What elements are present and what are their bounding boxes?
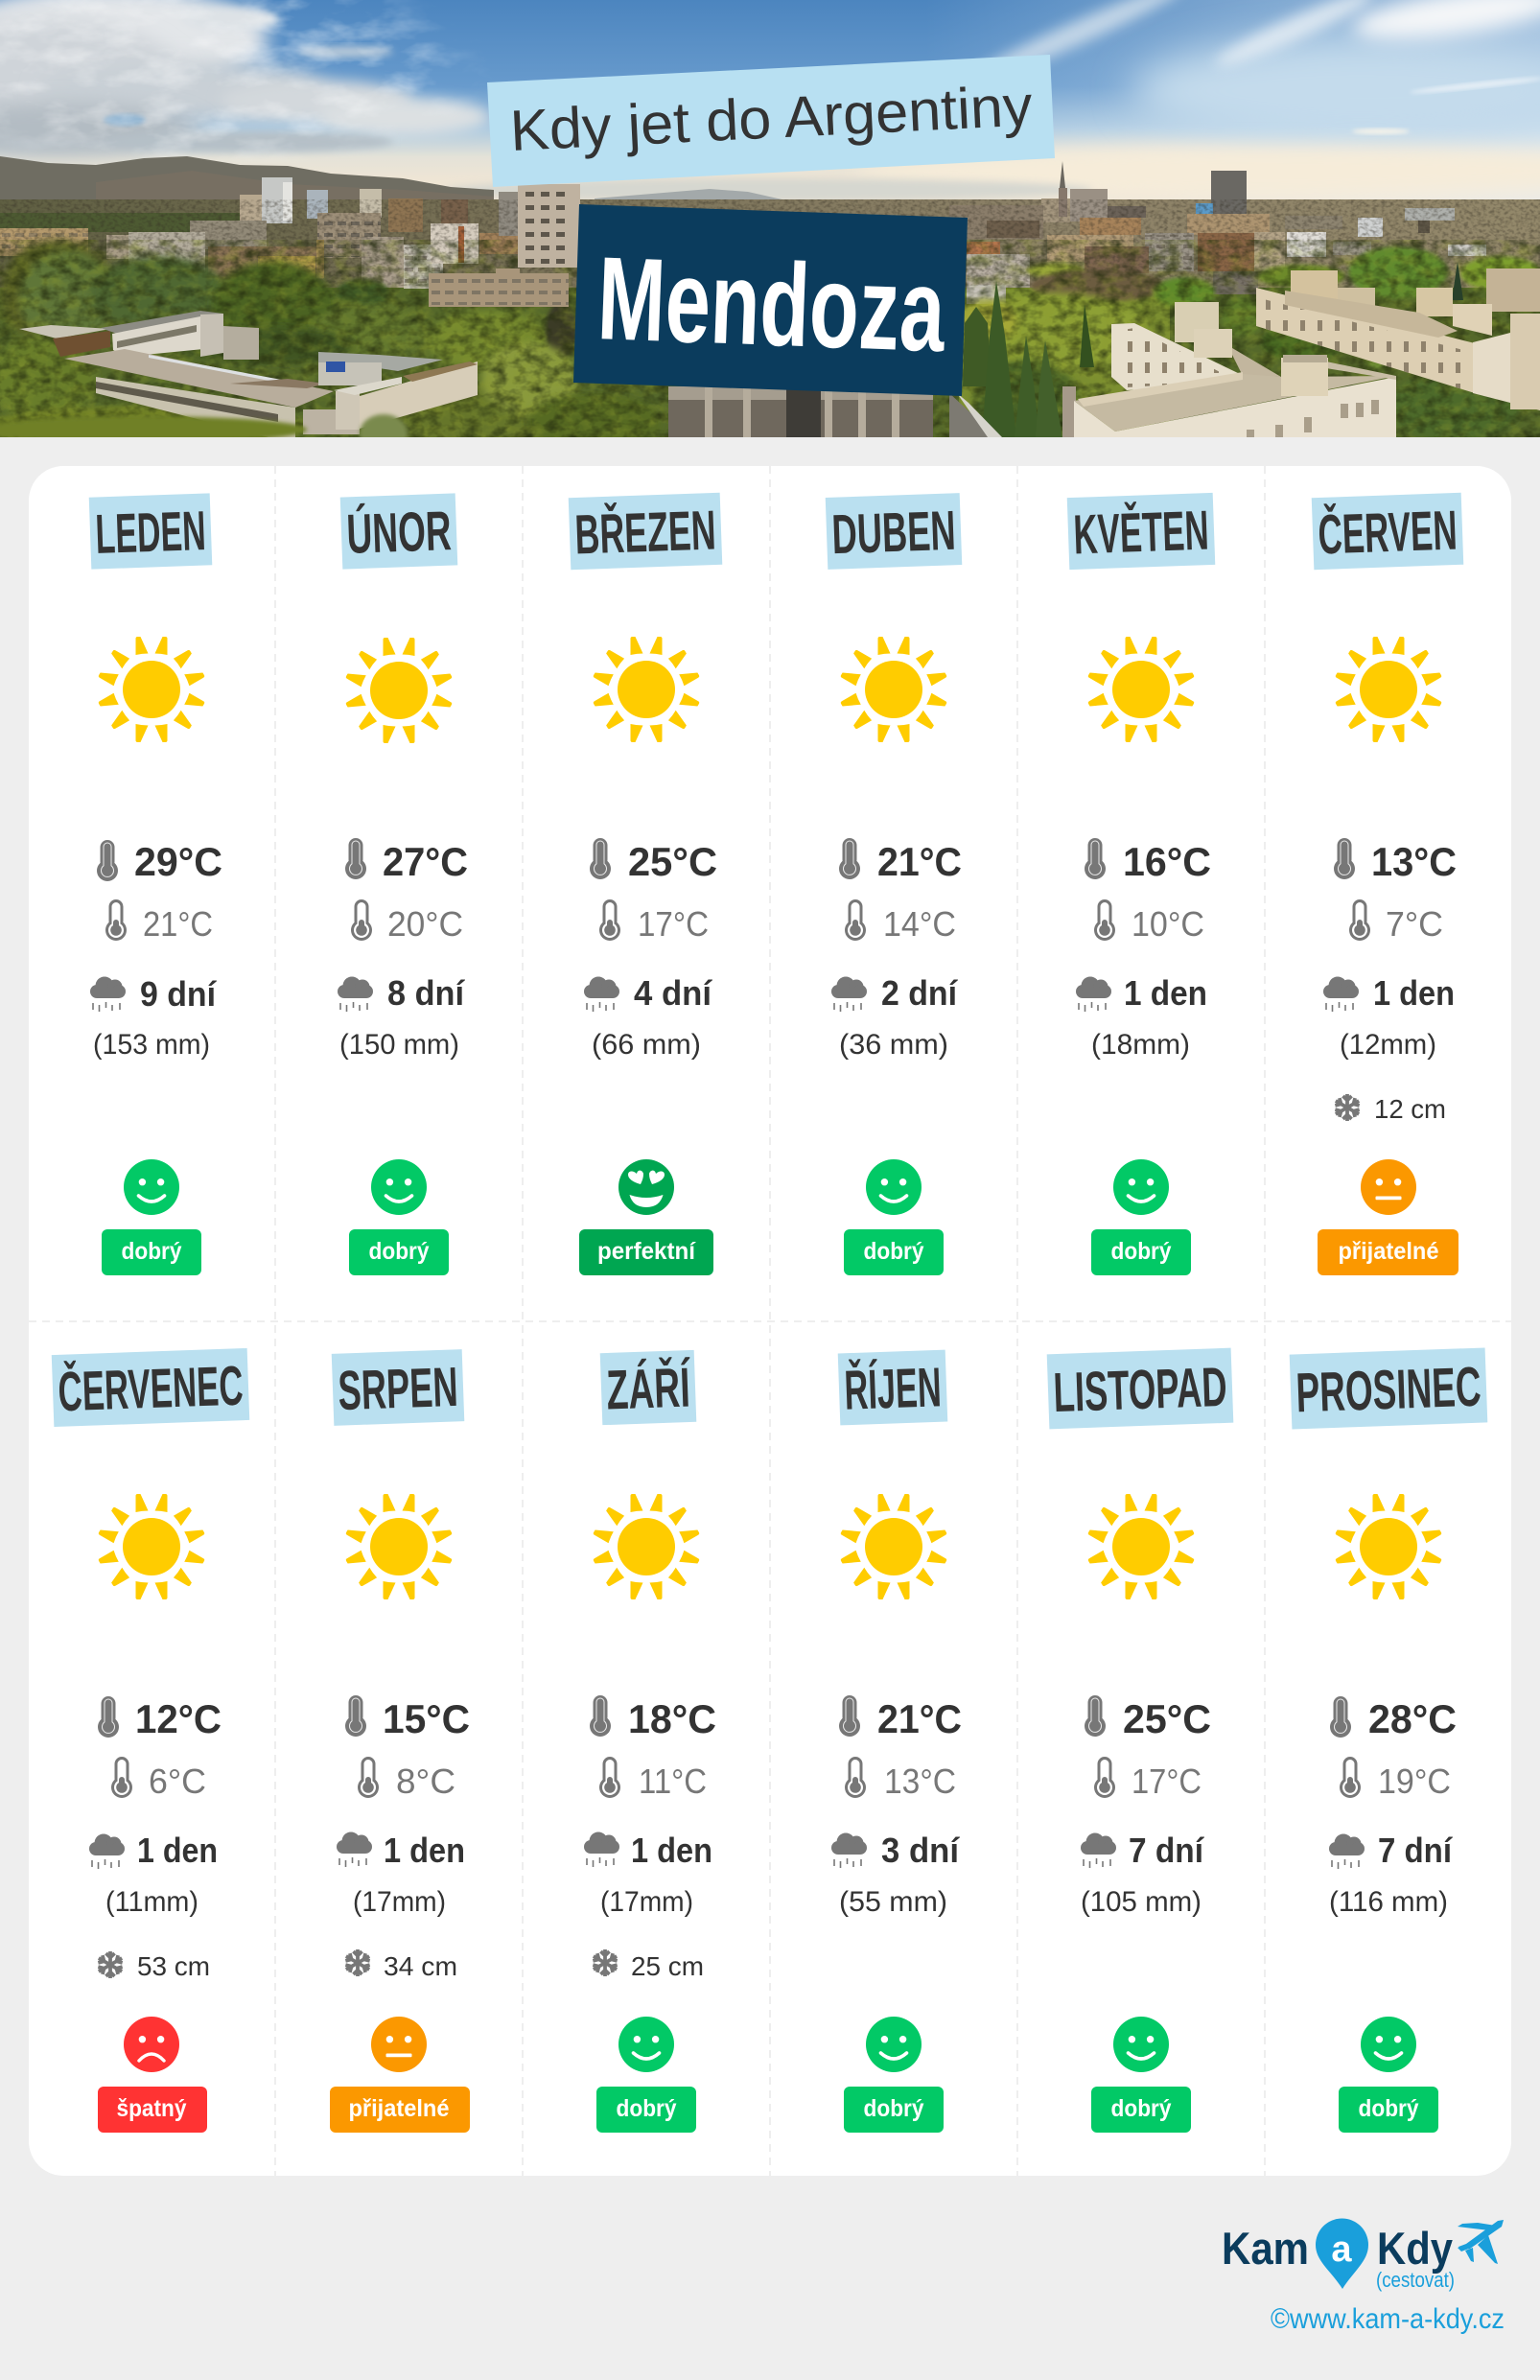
month: duben (826, 493, 962, 1275)
rating badge (1318, 1229, 1458, 1275)
rating badge: dobrý (121, 1238, 182, 1265)
rainy days: 2 dní (881, 973, 958, 1013)
low temperature (105, 899, 213, 944)
month label (569, 493, 722, 570)
precipitation: (17mm) (353, 1886, 446, 1918)
icon: sun (1335, 637, 1442, 742)
rainy days: 1 den (137, 1831, 218, 1870)
rainy days: 1 den (631, 1831, 712, 1870)
precipitation: (11mm) (105, 1886, 198, 1918)
title banner: Kdy jet do Argentiny: Kdy jet do Argentiny (508, 73, 1034, 163)
month: únor (338, 493, 468, 1275)
low temperature (599, 899, 709, 944)
icon: sun (98, 637, 205, 742)
month: březen (569, 493, 722, 1275)
rainy days (338, 973, 465, 1013)
month: září (584, 1350, 716, 2133)
logo: Kam a Kdy (1222, 2219, 1504, 2292)
title banner: Mendoza: Mendoza (595, 233, 948, 377)
high temperature: 18°C (628, 1696, 716, 1741)
rainy days: 8 dní (387, 973, 465, 1013)
low temperature (1094, 899, 1204, 944)
rating badge (102, 1229, 201, 1275)
snowfall (97, 1951, 210, 1981)
rating face (866, 1159, 922, 1215)
snowfall (1334, 1094, 1446, 1124)
month label: ZÁŘÍ (605, 1356, 692, 1421)
icon: sun (840, 637, 947, 742)
month: červen (1312, 493, 1463, 1275)
month: leden (89, 493, 222, 1275)
month label (1047, 1348, 1233, 1429)
icon: sun (593, 637, 700, 742)
month label: DUBEN (830, 500, 957, 566)
low temperature: 11°C (639, 1762, 707, 1801)
rating badge: dobrý (863, 2095, 924, 2122)
high temperature: 13°C (1371, 839, 1457, 884)
rating badge (844, 1229, 944, 1275)
low temperature: 6°C (149, 1762, 206, 1801)
rainy days (1323, 973, 1455, 1013)
low temperature (599, 1757, 707, 1801)
icon: sun (345, 1494, 453, 1599)
month: srpen (330, 1349, 470, 2133)
high temperature (590, 838, 717, 884)
month label (1290, 1347, 1487, 1430)
low temperature: 17°C (638, 904, 709, 944)
icon: map pin: a (1331, 2229, 1352, 2270)
month label (332, 1349, 464, 1426)
precipitation: (116 mm) (1329, 1886, 1448, 1918)
high temperature (839, 838, 962, 884)
precipitation: (36 mm) (839, 1029, 948, 1061)
month label (52, 1348, 249, 1427)
low temperature (845, 1757, 956, 1801)
rating badge (349, 1229, 449, 1275)
precipitation: (17mm) (600, 1886, 693, 1918)
rainy days (831, 1831, 960, 1870)
rating face: bad (124, 2017, 179, 2072)
rainy days: 1 den (1124, 973, 1207, 1013)
rating face (1113, 2017, 1169, 2072)
rainy days: 1 den (384, 1831, 465, 1870)
icon: sun (1087, 1494, 1195, 1599)
month label (826, 493, 962, 570)
icon: sun (98, 1494, 205, 1599)
rating badge (596, 2087, 696, 2133)
low temperature (111, 1757, 206, 1801)
rating badge (1091, 2087, 1191, 2133)
rainy days: 3 dní (881, 1831, 960, 1870)
month: listopad (1047, 1348, 1233, 2133)
snowfall (344, 1949, 457, 1981)
logo: Kam a Kdy: Kdy (1377, 2223, 1453, 2274)
low temperature (358, 1757, 455, 1801)
panel: monthly weather card (29, 466, 1511, 2176)
rainy days: 1 den (1373, 973, 1455, 1013)
high temperature: 15°C (383, 1696, 470, 1741)
title banner: Mendoza (573, 204, 968, 396)
rating badge: dobrý (1110, 2095, 1172, 2122)
month label: ÚNOR (345, 500, 453, 566)
icon: sun (345, 638, 453, 743)
precipitation: (18mm) (1091, 1029, 1190, 1061)
rating face (1113, 1159, 1169, 1215)
website url: ©www.kam-a-kdy.cz (1271, 2303, 1505, 2335)
rating badge: perfektní (597, 1238, 696, 1265)
month: říjen (831, 1350, 962, 2133)
rainy days: 7 dní (1129, 1831, 1204, 1870)
precipitation: (66 mm) (592, 1029, 701, 1061)
high temperature: 21°C (877, 1696, 962, 1741)
high temperature (98, 1696, 222, 1741)
rating badge: dobrý (1358, 2095, 1419, 2122)
high temperature (1085, 838, 1211, 884)
rating badge (330, 2087, 470, 2133)
high temperature (97, 839, 222, 884)
rainy days: 7 dní (1378, 1831, 1453, 1870)
snowfall: 34 cm (384, 1951, 457, 1981)
icon: sun (1087, 637, 1195, 742)
month label: KVĚTEN (1072, 500, 1210, 566)
rating badge: přijatelné (349, 2095, 450, 2122)
high temperature (345, 1695, 470, 1741)
low temperature: 21°C (143, 904, 213, 944)
low temperature: 13°C (884, 1762, 956, 1801)
rating face (1361, 2017, 1416, 2072)
rating badge: špatný (117, 2095, 187, 2122)
logo: Kam a Kdy: Kam (1222, 2223, 1309, 2274)
rating badge (844, 2087, 944, 2133)
precipitation: (105 mm) (1081, 1886, 1202, 1918)
icon: airplane (1458, 2220, 1504, 2264)
month label: SRPEN (337, 1356, 459, 1422)
high temperature: 25°C (1123, 1696, 1211, 1741)
low temperature (1349, 899, 1443, 944)
snowfall: 53 cm (137, 1951, 210, 1981)
low temperature (1340, 1757, 1451, 1801)
rating badge (579, 1229, 713, 1275)
rainy days (90, 974, 217, 1014)
high temperature: 21°C (877, 839, 962, 884)
rating face (371, 2017, 427, 2072)
precipitation: (12mm) (1340, 1029, 1436, 1061)
header photo: Mendoza skyline (0, 0, 1540, 453)
high temperature: 27°C (383, 839, 468, 884)
low temperature: 7°C (1386, 904, 1443, 944)
month label (1312, 493, 1463, 570)
rainy days (584, 973, 712, 1013)
low temperature: 10°C (1132, 904, 1204, 944)
low temperature: 14°C (883, 904, 956, 944)
month: květen (1067, 493, 1215, 1275)
icon: sun (1335, 1494, 1442, 1599)
month label: LEDEN (94, 500, 207, 566)
month label (1067, 493, 1215, 570)
low temperature: 8°C (396, 1762, 455, 1801)
high temperature (1085, 1695, 1211, 1741)
rainy days: 4 dní (634, 973, 712, 1013)
precipitation: (153 mm) (93, 1029, 210, 1061)
rating face (124, 1159, 179, 1215)
icon: map pin (1316, 2219, 1368, 2289)
high temperature (345, 838, 468, 884)
month label (340, 493, 457, 570)
high temperature: 25°C (628, 839, 717, 884)
snowfall: 25 cm (631, 1951, 704, 1981)
month label: LISTOPAD (1052, 1356, 1228, 1424)
rating badge (1091, 1229, 1191, 1275)
high temperature: 16°C (1123, 839, 1211, 884)
precipitation: (55 mm) (839, 1886, 947, 1918)
low temperature: 20°C (387, 904, 463, 944)
rating badge: přijatelné (1339, 1238, 1439, 1265)
rating badge: dobrý (368, 1238, 430, 1265)
high temperature (1330, 1696, 1457, 1741)
snowfall: 12 cm (1374, 1094, 1446, 1124)
rating face (866, 2017, 922, 2072)
icon: sun (840, 1494, 947, 1599)
high temperature (590, 1695, 716, 1741)
rainy days (89, 1831, 218, 1870)
rainy days (1081, 1831, 1204, 1870)
low temperature (1094, 1757, 1202, 1801)
high temperature: 28°C (1368, 1696, 1457, 1741)
low temperature: 19°C (1378, 1762, 1451, 1801)
month: prosinec (1290, 1347, 1487, 2133)
high temperature (1334, 838, 1457, 884)
rating badge: dobrý (1110, 1238, 1172, 1265)
rainy days (831, 973, 958, 1013)
rating face (618, 2017, 674, 2072)
high temperature (839, 1695, 962, 1741)
rainy days (337, 1831, 465, 1870)
title banner: Kdy jet do Argentiny (487, 55, 1055, 187)
high temperature: 29°C (134, 839, 222, 884)
icon: sun (593, 1494, 700, 1599)
month label (600, 1350, 696, 1425)
precipitation: (150 mm) (339, 1029, 459, 1061)
rating badge (1339, 2087, 1438, 2133)
rainy days (1329, 1831, 1453, 1870)
rainy days (584, 1831, 712, 1870)
rating face (371, 1159, 427, 1215)
low temperature (845, 899, 956, 944)
rating badge: dobrý (616, 2095, 677, 2122)
month: červenec (52, 1348, 249, 2133)
high temperature: 12°C (135, 1696, 222, 1741)
month label: BŘEZEN (573, 499, 717, 567)
rainy days: 9 dní (140, 974, 217, 1014)
rating face: perfect (618, 1159, 674, 1215)
logo: Kam a Kdy: (cestovat) (1376, 2268, 1455, 2292)
month label: ČERVENEC (57, 1355, 245, 1423)
low temperature (351, 899, 463, 944)
rainy days (1076, 973, 1207, 1013)
month label (838, 1350, 947, 1425)
low temperature: 17°C (1132, 1762, 1202, 1801)
rating badge: dobrý (863, 1238, 924, 1265)
month label (89, 493, 212, 570)
rating face (1361, 1159, 1416, 1215)
rating badge (98, 2087, 207, 2133)
snowfall (592, 1949, 704, 1981)
month label: ŘÍJEN (843, 1356, 943, 1422)
